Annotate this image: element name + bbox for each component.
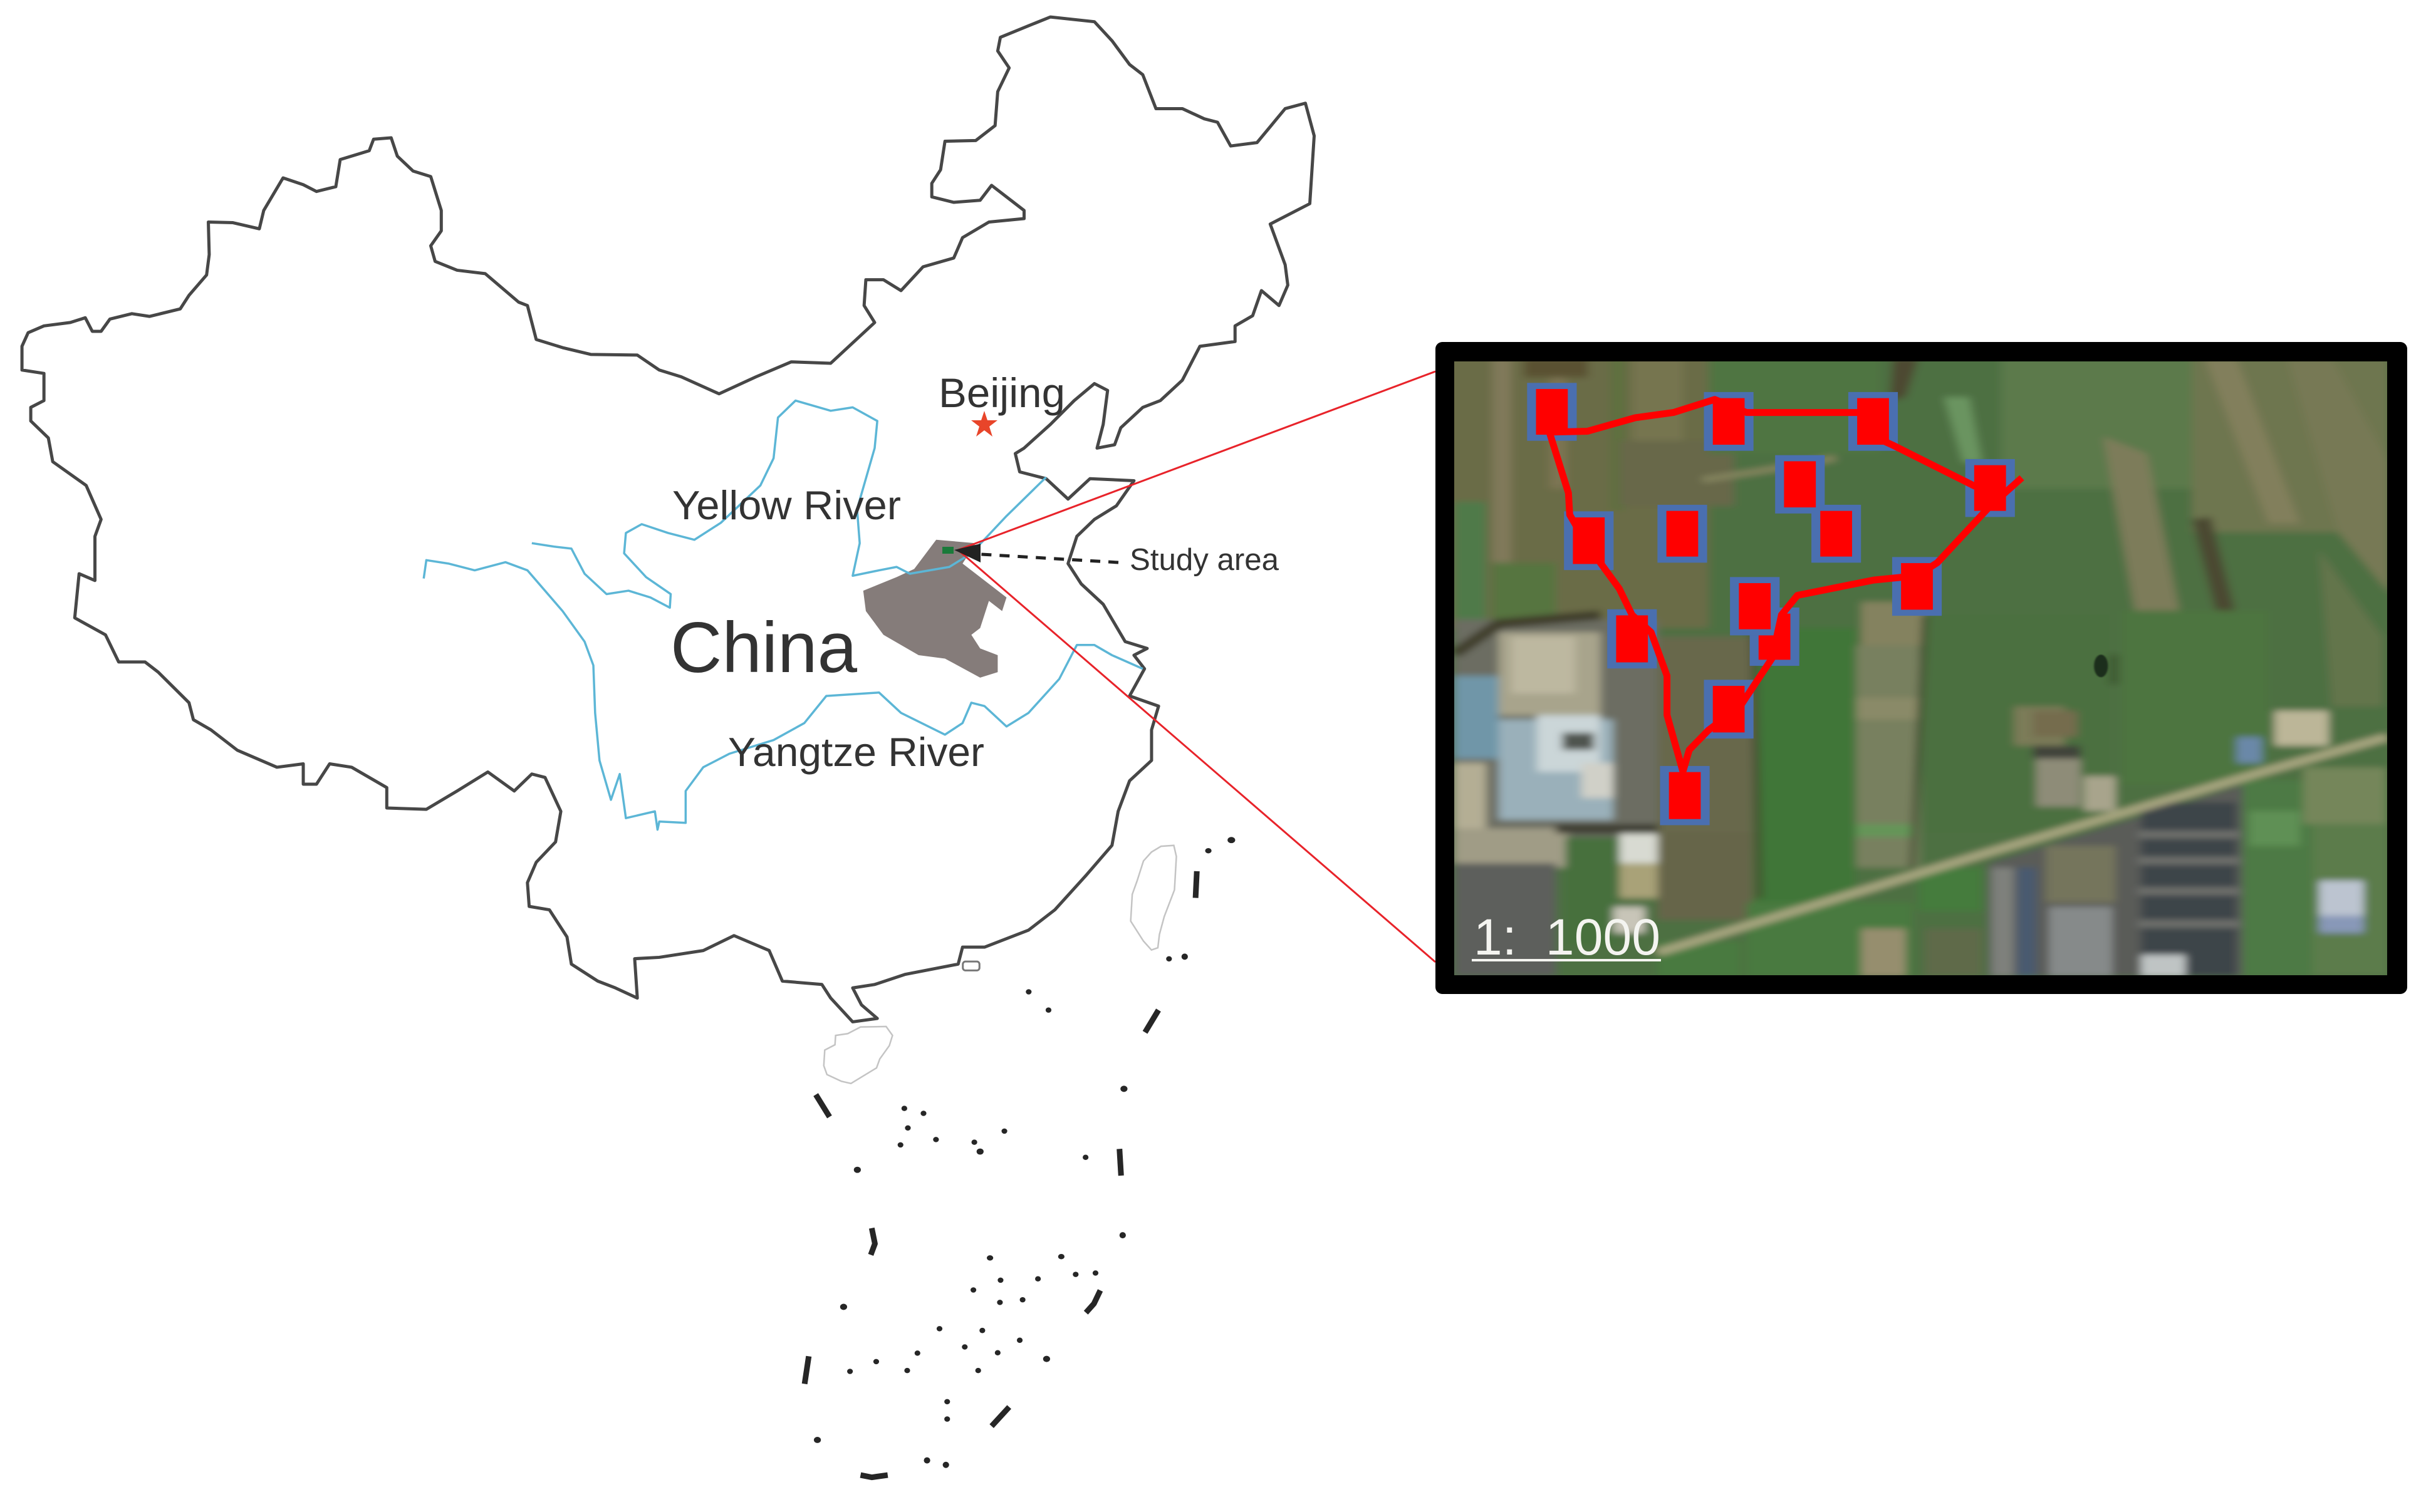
red route line	[1549, 400, 2022, 772]
sample plots	[1527, 383, 2015, 825]
study area green marker	[942, 547, 954, 554]
label: China: China	[670, 608, 858, 688]
label: Beijing: Beijing	[939, 370, 1065, 416]
study area arrow	[954, 544, 1118, 562]
Beijing star	[971, 411, 997, 437]
Yellow River line	[532, 401, 1046, 608]
label: Yangtze River: Yangtze River	[728, 729, 984, 775]
blue and red sample plot markers	[1527, 383, 2022, 825]
inset satellite panel	[1429, 332, 2426, 1029]
Hainan island	[824, 1027, 892, 1084]
island dots	[814, 837, 1235, 1468]
map of China	[22, 17, 1435, 1478]
Yangtze River line	[424, 560, 1143, 830]
nine-dash line segments	[804, 871, 1197, 1478]
grey shaded region	[863, 540, 1006, 678]
satellite image	[1454, 361, 2387, 975]
black frame	[1435, 342, 2407, 994]
Taiwan island	[1131, 846, 1177, 950]
red callout lines	[958, 371, 1435, 962]
China border outline	[22, 17, 1314, 1022]
islands and South China Sea	[804, 837, 1235, 1478]
scale label: 1: 1000	[1474, 909, 1660, 966]
small coastal island	[963, 961, 979, 970]
label: Study area: Study area	[1130, 543, 1279, 577]
label: Yellow River: Yellow River	[672, 482, 901, 528]
